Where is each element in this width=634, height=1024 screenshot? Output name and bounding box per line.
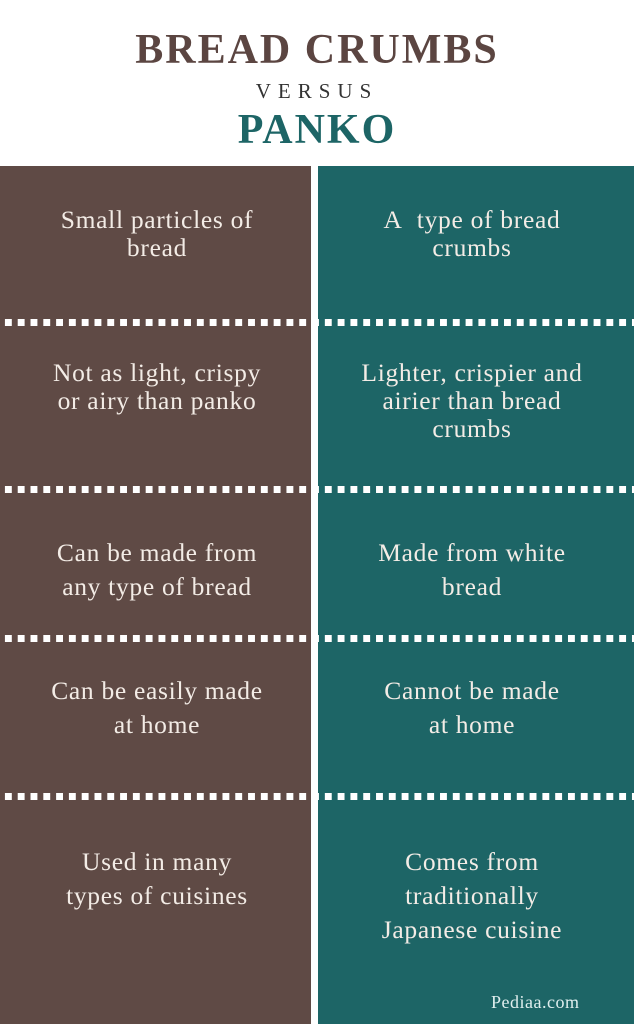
text: row4 right: at home xyxy=(429,710,515,739)
text: row3 right xyxy=(378,538,566,601)
text: row2 right: airier than bread xyxy=(382,386,561,415)
text: row3 left: Can be made from xyxy=(57,538,257,567)
text: row5 left: types of cuisines xyxy=(66,881,248,910)
text: row2 right: Lighter, crispier and xyxy=(361,358,583,387)
text: row1 right: crumbs xyxy=(432,233,512,262)
text: row4 left xyxy=(51,676,263,739)
text: row2 left: or airy than panko xyxy=(58,386,256,415)
text: row1 left xyxy=(61,205,253,262)
text: row1 left: bread xyxy=(127,233,187,262)
text: row1 right: A type of bread xyxy=(384,205,560,234)
text: row2 right xyxy=(361,358,583,443)
panel: bread crumbs xyxy=(0,166,311,1024)
text: row4 left: at home xyxy=(114,710,200,739)
text: row5 left xyxy=(66,847,248,910)
text: row5 right: traditionally xyxy=(405,881,539,910)
text: row3 left xyxy=(57,538,257,601)
text: row1 left: Small particles of xyxy=(61,205,253,234)
text: row4 right: Cannot be made xyxy=(384,676,560,705)
text: row3 right: bread xyxy=(442,572,502,601)
text: row4 left: Can be easily made xyxy=(51,676,263,705)
text: row2 left: Not as light, crispy xyxy=(53,358,261,387)
text: row5 left: Used in many xyxy=(82,847,232,876)
subtitle versus: VERSUS xyxy=(256,79,378,103)
text: row3 left: any type of bread xyxy=(62,572,252,601)
text: row5 right xyxy=(382,847,562,944)
text: row5 right: Japanese cuisine xyxy=(382,915,562,944)
text: row1 right xyxy=(384,205,560,262)
title: BREAD CRUMBS xyxy=(135,27,499,73)
title panko: PANKO xyxy=(238,107,396,153)
text: row4 right xyxy=(384,676,560,739)
text: row5 right: Comes from xyxy=(405,847,539,876)
text: row3 right: Made from white xyxy=(378,538,566,567)
panel: panko xyxy=(318,166,634,1024)
text: row2 left xyxy=(53,358,261,415)
text: row2 right: crumbs xyxy=(432,414,512,443)
logo: pediaa: Pediaa.com xyxy=(491,992,579,1012)
